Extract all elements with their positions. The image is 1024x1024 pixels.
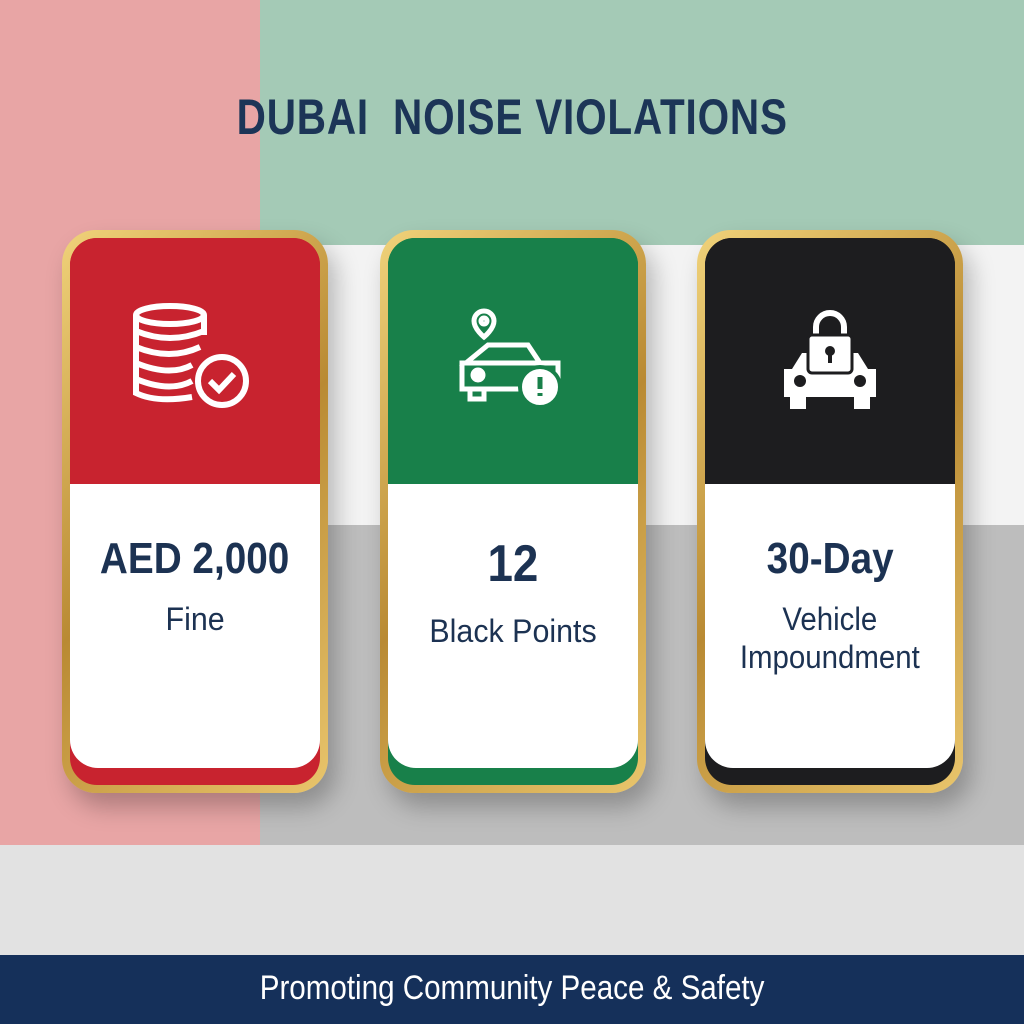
icon: coins with check [133, 303, 249, 408]
label: Vehicle Impoundment [740, 601, 920, 675]
background: red band [0, 0, 260, 850]
title: DUBAI NOISE VIOLATIONS [236, 89, 788, 145]
label: Vehicle Impoundment: Impoundment [740, 639, 920, 675]
background: gray band [260, 525, 1024, 845]
icon: car with pin and alert [459, 308, 560, 405]
value: 12: 12 [488, 535, 538, 593]
footer banner [0, 955, 1024, 1024]
value: AED 2,000: AED 2,000 [100, 534, 290, 583]
icon: car with padlock [784, 310, 876, 409]
footer banner: Promoting Community Peace & Safety [260, 969, 764, 1007]
label: Fine: Fine [165, 601, 225, 637]
card: fine [62, 230, 328, 793]
background: white band [260, 245, 1024, 525]
label: Vehicle Impoundment: Vehicle [783, 601, 877, 637]
background: green band [260, 0, 1024, 245]
label: Black Points: Black Points [429, 613, 597, 649]
card: black points [380, 230, 646, 793]
value: 30-Day: 30-Day [767, 534, 893, 583]
card: impoundment [697, 230, 963, 793]
background: light bottom band [0, 845, 1024, 955]
